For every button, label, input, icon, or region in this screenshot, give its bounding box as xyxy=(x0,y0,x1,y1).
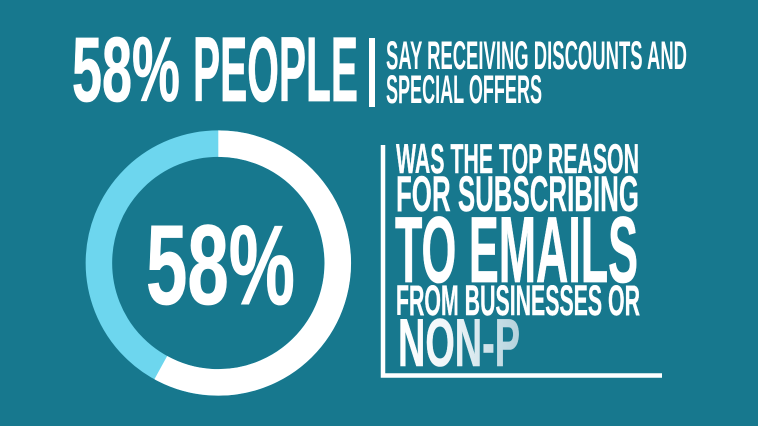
text block: top reason for subscribing: NON-P xyxy=(398,305,520,381)
heading divider xyxy=(369,38,375,107)
subheading: discounts and special offers: SPECIAL OFFERS xyxy=(386,68,542,112)
donut value: 58% xyxy=(146,202,295,328)
text block: top reason for subscribing xyxy=(395,135,640,381)
subheading: discounts and special offers xyxy=(386,34,687,112)
heading: 58% people xyxy=(72,19,358,121)
donut chart: 58% xyxy=(99,144,338,382)
heading: 58% people: 58% xyxy=(72,19,180,121)
text frame bracket xyxy=(383,145,662,376)
text: PEOPLE xyxy=(193,19,358,121)
